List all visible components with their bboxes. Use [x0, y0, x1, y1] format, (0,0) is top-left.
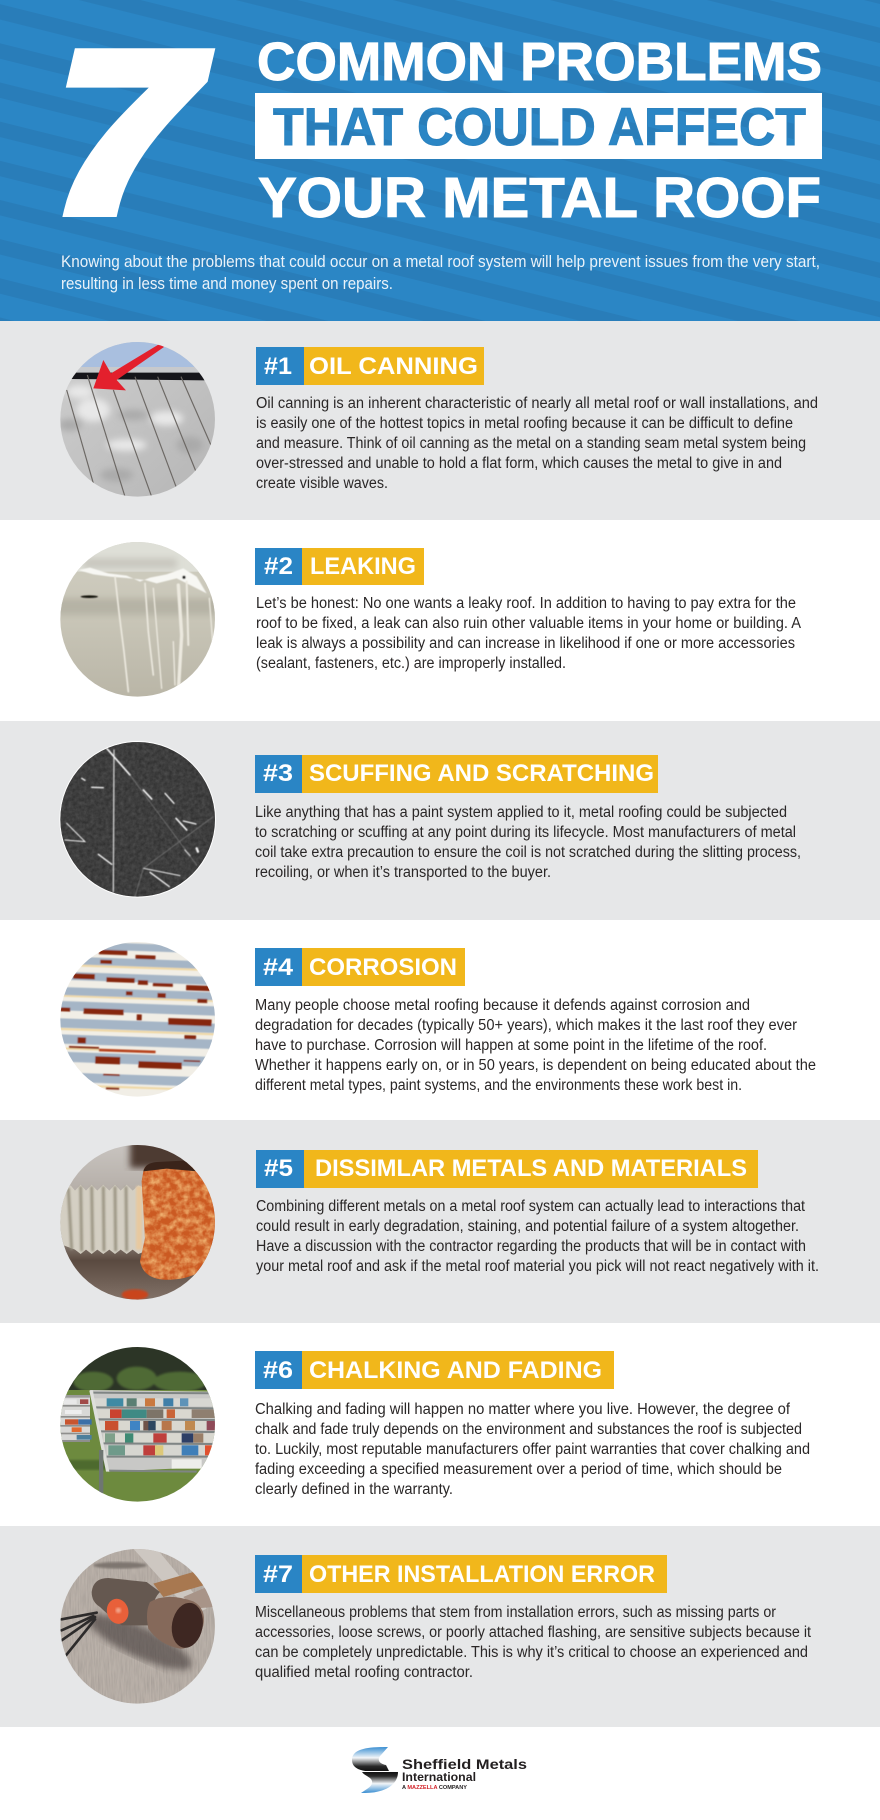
footer logo: Sheffield Metals International [352, 1747, 527, 1793]
title line 1: COMMON PROBLEMS [257, 32, 822, 92]
heading #1 [256, 347, 484, 385]
photo: corroded corrugated roof [60, 942, 215, 1096]
photo: paint test racks [60, 1347, 215, 1502]
body text #2: roof to be fixed, a leak can also ruin other valuable items in your home or building. A [256, 615, 802, 632]
heading #3 [255, 755, 658, 793]
body text #3 [255, 804, 801, 881]
photo: scratched dark metal [60, 741, 216, 898]
panel: leaking [60, 542, 801, 697]
body text #1: Oil canning is an inherent characteristic of nearly all metal roof or wall installations, and [256, 395, 818, 412]
heading #7: #7 [263, 1561, 293, 1588]
panel: oil canning [0, 321, 880, 520]
intro text [61, 253, 820, 293]
body text #4: degradation for decades (typically 50+ years), which makes it the last roof they ever [255, 1017, 797, 1034]
body text #3: coil take extra precaution to ensure the coil is not scratched during the slitting process, [255, 844, 801, 861]
photo: hammer and nails on wood [60, 1549, 215, 1704]
intro text: resulting in less time and money spent on repairs. [61, 275, 393, 293]
panel: other installation error [0, 1526, 880, 1727]
heading #7 [255, 1555, 667, 1593]
heading #1: OIL CANNING [309, 353, 478, 380]
body text #6: clearly defined in the warranty. [255, 1481, 453, 1498]
body text #5: Have a discussion with the contractor regarding the products that will be in contact with [256, 1238, 806, 1255]
body text #4: have to purchase. Corrosion will happen at some point in the lifetime of the roof. [255, 1037, 767, 1054]
body text #4: different metal types, paint systems, and the environments these work best in. [255, 1077, 742, 1094]
company name line 2: International [402, 1772, 476, 1784]
body text #1: over-stressed and unable to hold a flat form, which causes the metal to give in and [256, 455, 782, 472]
header banner [0, 0, 880, 321]
photo: oil canning roof [60, 342, 215, 497]
big number 7: 7 [23, 8, 228, 258]
body text #1 [256, 395, 818, 492]
heading #6 [255, 1351, 614, 1389]
panel: scuffing and scratching [0, 721, 880, 920]
body text #4: Whether it happens early on, or in 50 years, is dependent on being educated about the [255, 1057, 816, 1074]
body text #4: Many people choose metal roofing because it defends against corrosion and [255, 997, 750, 1014]
heading #4 [255, 948, 465, 986]
body text #7 [255, 1604, 812, 1681]
body text #5: your metal roof and ask if the metal roof material you pick will not react negatively with it. [256, 1258, 819, 1275]
heading #2 [255, 548, 424, 585]
heading #4: #4 [263, 954, 294, 981]
body text #2: leak is always a possibility and can increase in likelihood if one or more accessories [256, 635, 795, 652]
body text #3: Like anything that has a paint system applied to it, metal roofing could be subjected [255, 804, 787, 821]
body text #4 [255, 997, 816, 1094]
body text #2: Let’s be honest: No one wants a leaky roof. In addition to having to pay extra for the [256, 595, 796, 612]
panel: chalking and fading [60, 1347, 810, 1502]
photo: leaking ceiling [60, 542, 215, 697]
body text #6 [255, 1401, 810, 1498]
intro text: Knowing about the problems that could occur on a metal roof system will help prevent issues from the very start, [61, 253, 820, 271]
body text #7: Miscellaneous problems that stem from installation errors, such as missing parts or [255, 1604, 776, 1621]
body text #3: recoiling, or when it’s transported to the buyer. [255, 864, 551, 881]
body text #5: Combining different metals on a metal roof system can actually lead to interactions that [256, 1198, 806, 1215]
company name: Sheffield Metals [402, 1756, 527, 1772]
body text #1: and measure. Think of oil canning as the metal on a standing seam metal system being [256, 435, 806, 452]
title line 2 on white box: THAT COULD AFFECT [273, 98, 806, 157]
body text #6: Chalking and fading will happen no matter where you live. However, the degree of [255, 1401, 791, 1418]
body text #2 [256, 595, 802, 672]
heading #3: #3 [263, 760, 293, 787]
icon: red arrow [93, 344, 164, 390]
body text #1: create visible waves. [256, 475, 388, 492]
heading #7: OTHER INSTALLATION ERROR [309, 1561, 655, 1588]
heading #6: CHALKING AND FADING [309, 1357, 602, 1384]
body text #5: could result in early degradation, staining, and potential failure of a system altogether. [256, 1218, 799, 1235]
panel: corrosion [60, 942, 816, 1096]
heading #5 [256, 1150, 758, 1188]
body text #6: chalk and fade truly depends on the environment and substances the roof is subjected [255, 1421, 802, 1438]
heading #2: #2 [264, 553, 293, 580]
heading #4: CORROSION [309, 954, 457, 981]
photo: rusted bolt [60, 1145, 215, 1300]
body text #6: fading exceeding a specified measurement over a period of time, which should be [255, 1461, 782, 1478]
body text #3: to scratching or scuffing at any point during its lifecycle. Most manufacturers of metal [255, 824, 796, 841]
body text #7: accessories, loose screws, or poorly attached flashing, are sensitive subjects because it [255, 1624, 812, 1641]
heading #6: #6 [263, 1357, 293, 1384]
heading #3: SCUFFING AND SCRATCHING [309, 760, 654, 787]
body text #7: can be completely unpredictable. This is why it’s critical to choose an experienced and [255, 1644, 808, 1661]
heading #5: DISSIMLAR METALS AND MATERIALS [315, 1155, 747, 1182]
heading #2: LEAKING [310, 553, 416, 580]
panel: dissimilar metals [0, 1120, 880, 1323]
body text #5 [256, 1198, 819, 1275]
heading #1: #1 [264, 353, 292, 380]
title line 3: YOUR METAL ROOF [258, 166, 821, 230]
body text #6: to. Luckily, most reputable manufacturers offer paint warranties that cover chalking and [255, 1441, 810, 1458]
tagline: A MAZZELLA COMPANY [402, 1785, 467, 1791]
body text #7: qualified metal roofing contractor. [255, 1664, 473, 1681]
heading #5: #5 [264, 1155, 293, 1182]
body text #2: (sealant, fasteners, etc.) are improperly installed. [256, 655, 566, 672]
icon: S mark [352, 1747, 398, 1793]
body text #1: is easily one of the hottest topics in metal roofing because it can be difficult to define [256, 415, 793, 432]
